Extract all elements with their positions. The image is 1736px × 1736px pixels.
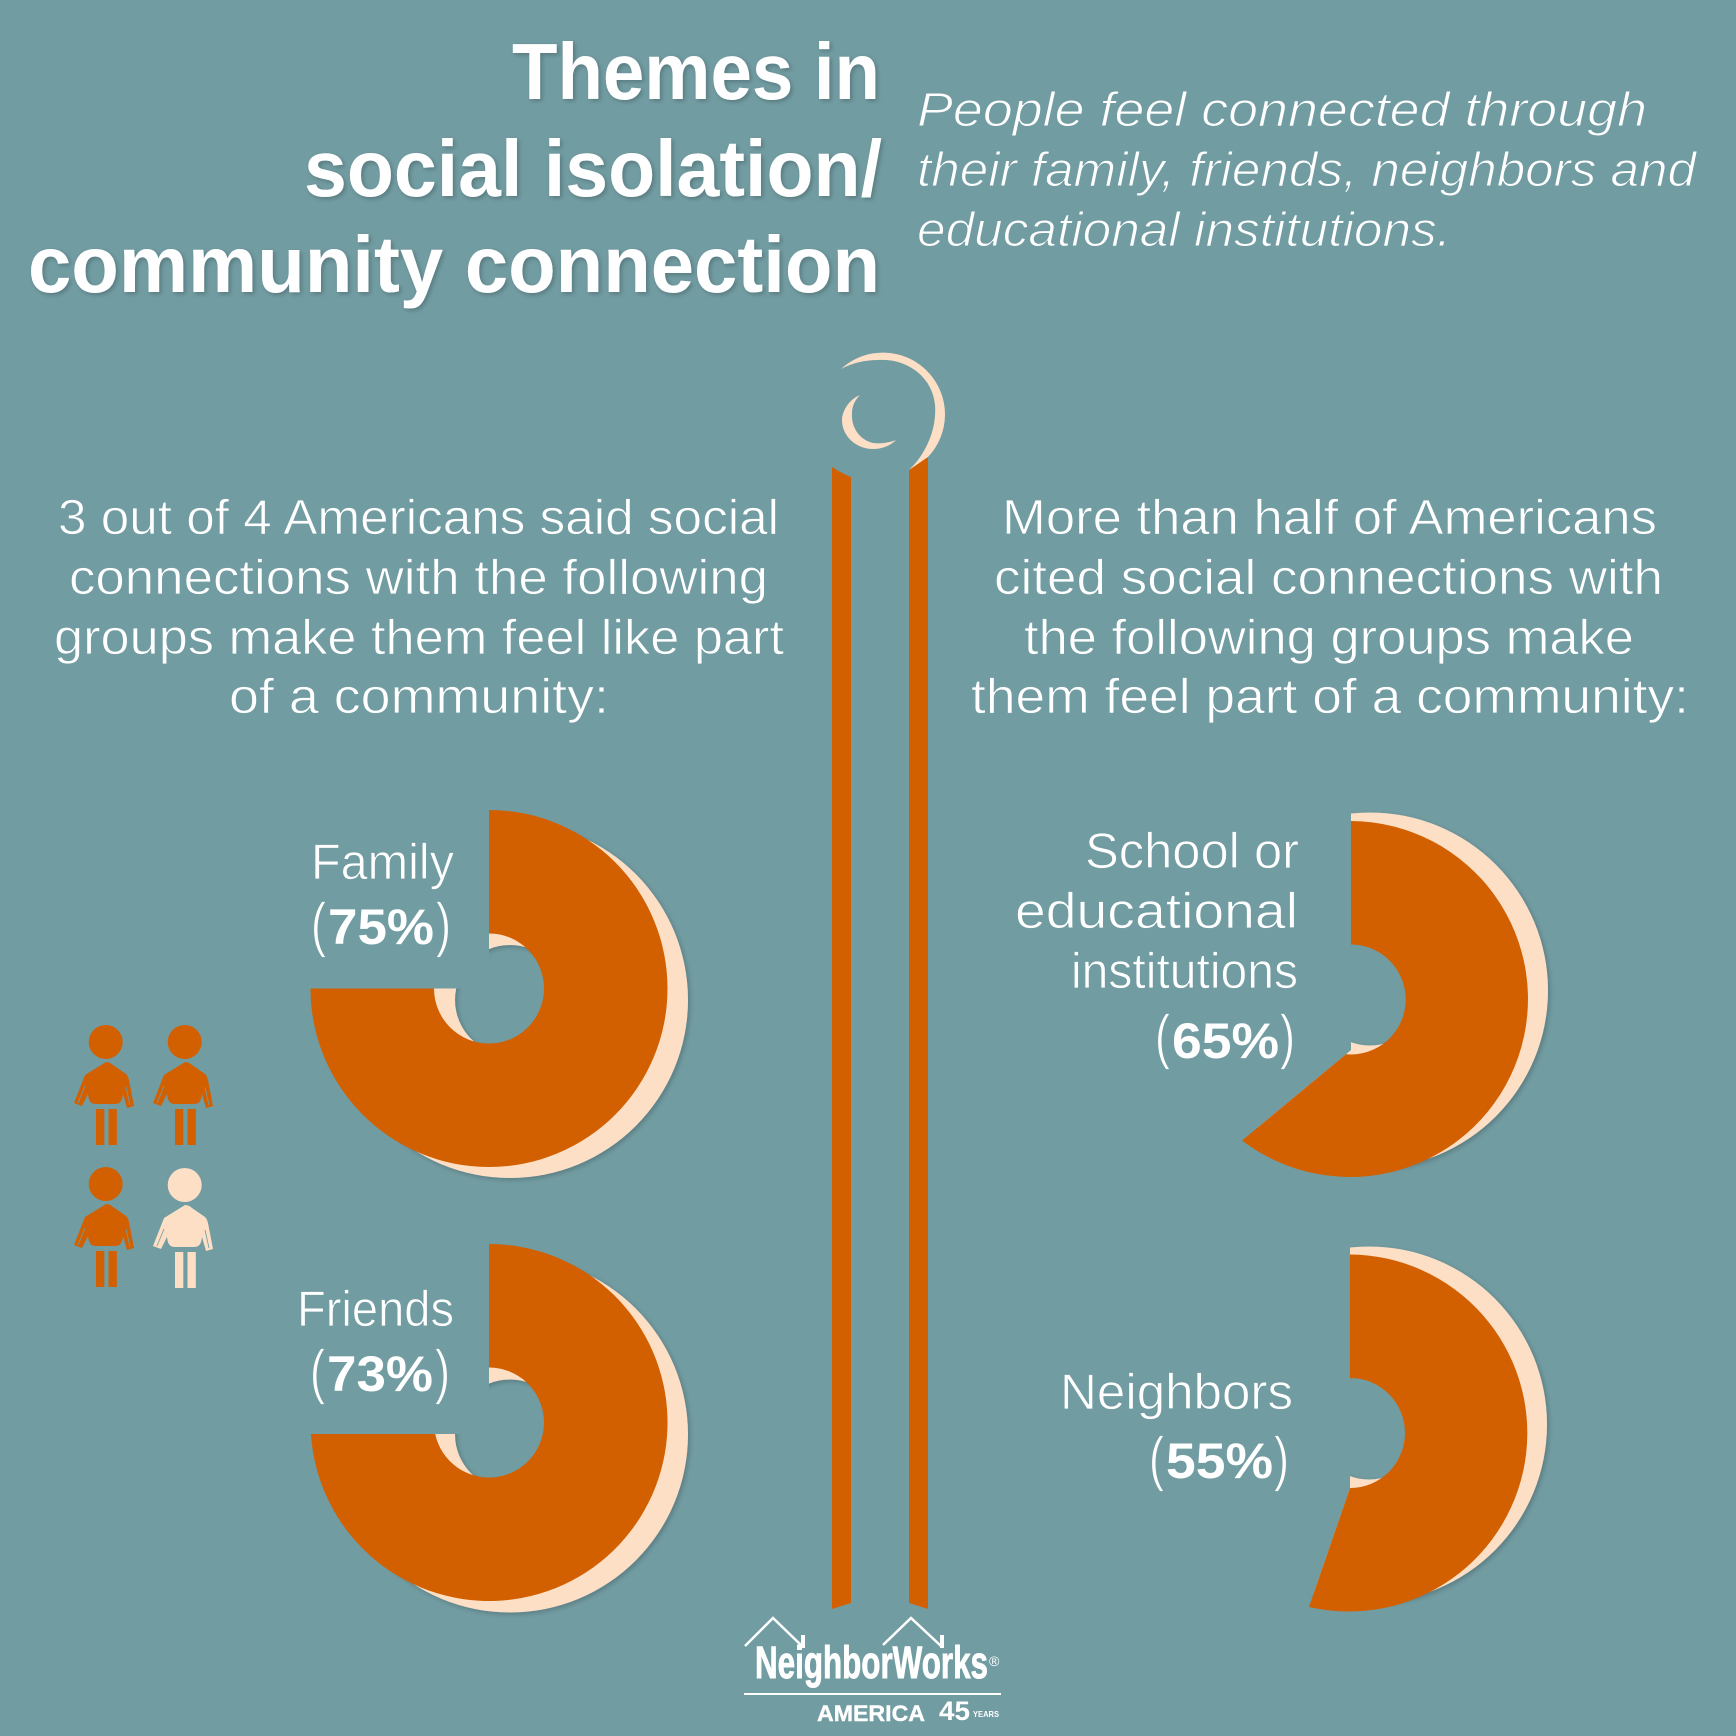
label: family: ): [436, 891, 451, 958]
label: friends: 73%: [327, 1346, 433, 1402]
left heading: [54, 491, 784, 724]
label: neighbors: 55%: [1166, 1433, 1273, 1489]
logo: NeighborWorks America: AMERICA: [817, 1701, 925, 1726]
label: family: Family: [311, 834, 454, 890]
left heading: connections with the following: [69, 551, 768, 605]
label: neighbors: Neighbors: [1060, 1364, 1293, 1420]
label: friends: Friends: [297, 1281, 454, 1337]
left heading: 3 out of 4 Americans said social: [58, 491, 779, 545]
logo: NeighborWorks America: ®: [989, 1653, 1000, 1669]
title: Themes in: [512, 27, 880, 116]
logo: NeighborWorks America: NeighborWorks: [755, 1637, 988, 1688]
right heading: cited social connections with: [994, 551, 1663, 605]
right heading: [971, 491, 1689, 724]
label: school: ): [1280, 1003, 1295, 1070]
left heading: of a community:: [229, 670, 609, 724]
subtitle: their family, friends, neighbors and: [917, 144, 1697, 197]
label: school: educational: [1015, 883, 1298, 939]
logo: NeighborWorks America: YEARS: [973, 1709, 999, 1719]
right heading: them feel part of a community:: [971, 670, 1689, 724]
title: social isolation/: [304, 124, 882, 213]
label: family: (: [311, 891, 326, 958]
chart: family 75%: [310, 810, 688, 1178]
chart: school 65%: [1242, 812, 1552, 1177]
central tube divider: [832, 353, 945, 1609]
subtitle: [917, 84, 1697, 257]
title: [28, 27, 882, 309]
label: family: [311, 834, 454, 958]
label: school: [1015, 823, 1299, 1070]
label: school: 65%: [1172, 1013, 1279, 1069]
label: neighbors: (: [1149, 1425, 1164, 1492]
label: school: institutions: [1071, 943, 1298, 999]
icon: person 3: [74, 1167, 134, 1287]
right heading: the following groups make: [1024, 611, 1634, 665]
label: friends: [297, 1281, 454, 1405]
icon: person 2: [153, 1025, 213, 1145]
label: neighbors: ): [1274, 1425, 1289, 1492]
icon: person 1: [74, 1025, 134, 1145]
logo: NeighborWorks America: [744, 1618, 1001, 1726]
subtitle: educational institutions.: [917, 204, 1451, 257]
logo: NeighborWorks America: 45: [939, 1696, 970, 1726]
label: family: 75%: [328, 899, 434, 955]
subtitle: People feel connected through: [917, 84, 1647, 137]
icon: person 4 (cream): [153, 1168, 213, 1288]
right heading: More than half of Americans: [1002, 491, 1657, 545]
label: neighbors: [1060, 1364, 1293, 1492]
chart: friends 73%: [311, 1244, 688, 1612]
label: school: (: [1155, 1003, 1170, 1070]
title: community connection: [28, 220, 880, 309]
left heading: groups make them feel like part: [54, 611, 784, 665]
chart: neighbors 55%: [1309, 1246, 1550, 1612]
label: friends: (: [310, 1338, 325, 1405]
label: school: School or: [1085, 823, 1299, 879]
label: friends: ): [435, 1338, 450, 1405]
